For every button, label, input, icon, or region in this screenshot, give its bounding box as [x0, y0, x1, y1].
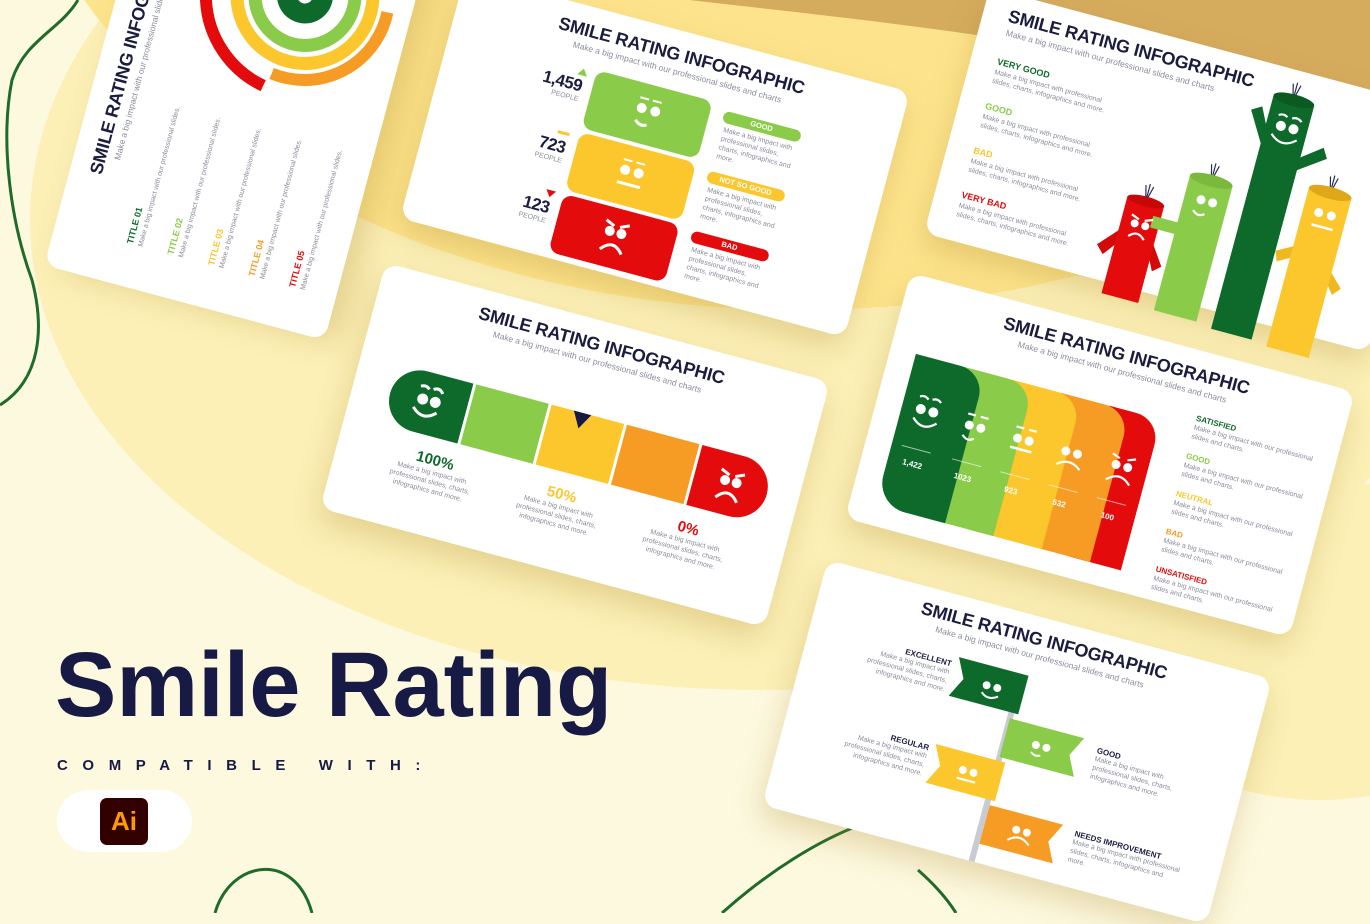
count 123: PEOPLE [518, 211, 546, 225]
count 1459: PEOPLE [550, 89, 579, 103]
marker triangle [569, 410, 591, 431]
card A rows: Make a big impact with our professional slides. [137, 106, 181, 247]
card D subtitle: Make a big impact with our professional slides and charts [1005, 28, 1216, 93]
icon: illustrator: Ai [111, 806, 137, 836]
count 1459: 1,459 [541, 67, 584, 95]
count 123 [518, 189, 556, 225]
label satisfied: SATISFIED [1195, 414, 1237, 433]
flag pole with flags [925, 657, 1084, 864]
label needs improvement: Make a big impact with professional slides, charts, infographics and more. [1067, 839, 1180, 879]
label bad [683, 232, 769, 290]
green happy box [581, 70, 712, 159]
label good: GOOD [984, 101, 1013, 118]
rating bar [389, 370, 768, 518]
label bad: Make a big impact with professional slides, charts, infographics and more. [967, 158, 1081, 203]
light green [1150, 216, 1180, 235]
count 723: 723 [537, 132, 568, 157]
label regular: REGULAR [890, 733, 930, 752]
label bad: Make a big impact with professional slides, charts, infographics and more. [683, 247, 761, 290]
card A rows: TITLE 04 [246, 239, 266, 277]
label unsatisfied: Make a big impact with our professional slides and charts. [1150, 575, 1273, 614]
label good: GOOD [1096, 746, 1122, 761]
card A rows: TITLE 03 [206, 228, 225, 267]
label not so good [699, 172, 785, 230]
card A rows: TITLE 01 [124, 206, 144, 245]
label very good: VERY GOOD [996, 56, 1051, 80]
card C subtitle: Make a big impact with our professional slides and charts [492, 329, 703, 395]
bars chart: 532 [1051, 497, 1067, 510]
card E title: SMILE RATING INFOGRAPHIC [1001, 313, 1252, 398]
yellow neutral box [564, 132, 696, 221]
label not so good: Make a big impact with professional slides, charts, infographics and more. [699, 187, 777, 230]
card C title: SMILE RATING INFOGRAPHIC [476, 303, 727, 388]
red [1093, 225, 1167, 273]
card D title: SMILE RATING INFOGRAPHIC [1006, 6, 1256, 91]
main title: Smile Rating [55, 634, 612, 736]
label 100%: 100% [414, 448, 456, 474]
label 0%: 0% [676, 518, 701, 540]
label 0%: Make a big impact with professional slides, charts, infographics and more. [642, 529, 723, 571]
faces [1129, 90, 1356, 277]
label excellent: EXCELLENT [904, 647, 953, 668]
bars chart: 1,422 [901, 457, 923, 471]
card F: flags [762, 560, 1272, 924]
label not so good: NOT SO GOOD [718, 175, 773, 197]
label bad: BAD [972, 145, 994, 160]
compatible with text: COMPATIBLE WITH: [57, 757, 435, 774]
label very bad: Make a big impact with professional slides, charts, infographics and more. [956, 202, 1069, 248]
label unsatisfied: UNSATISFIED [1155, 565, 1208, 587]
bars chart [882, 354, 1156, 570]
label neutral: Make a big impact with our professional slides and charts. [1170, 500, 1293, 538]
label good: Make a big impact with professional slides, charts, infographics and more. [1089, 756, 1173, 798]
label good: GOOD [1185, 451, 1211, 467]
card B: people counts [400, 0, 910, 337]
label needs improvement: NEEDS IMPROVEMENT [1074, 829, 1162, 861]
card A rows: TITLE 05 [287, 250, 306, 288]
card A rows: Make a big impact with our professional slides. [218, 128, 262, 269]
label bad: BAD [721, 239, 739, 252]
icon: illustrator [100, 798, 148, 845]
label satisfied: Make a big impact with our professional slides and charts. [1190, 424, 1313, 463]
card A rows: Make a big impact with our professional slides. [178, 117, 222, 258]
count 123: 123 [521, 192, 552, 217]
card E: vertical bars [845, 273, 1355, 637]
card F subtitle: Make a big impact with our professional slides and charts [934, 624, 1145, 690]
bars chart: 100 [1099, 510, 1115, 523]
card F title: SMILE RATING INFOGRAPHIC [919, 598, 1169, 683]
label good: GOOD [749, 119, 774, 133]
bars chart: 923 [1003, 484, 1018, 497]
label very good: Make a big impact with professional slides, charts, infographics and more. [991, 69, 1105, 114]
label good [715, 112, 801, 170]
label 100%: Make a big impact with professional slides, charts, infographics and more. [389, 461, 470, 503]
label excellent: Make a big impact with professional slides, charts, infographics and more. [866, 651, 950, 693]
card A rings chart [200, 0, 394, 92]
card D: tree characters [924, 0, 1370, 352]
card A rows: Make a big impact with our professional slides. [259, 138, 303, 280]
label bad: BAD [1165, 527, 1184, 540]
label 50%: Make a big impact with professional slides, charts, infographics and more. [515, 495, 597, 537]
red angry box [548, 194, 679, 283]
label regular: Make a big impact with professional slides, charts, infographics and more. [844, 735, 928, 777]
bars chart: 1023 [952, 471, 972, 484]
label very bad: VERY BAD [960, 190, 1007, 211]
count 723 [534, 130, 570, 165]
card A rows: TITLE 02 [165, 217, 184, 256]
label good: Make a big impact with professional slides, charts, infographics and more. [979, 113, 1093, 159]
yellow [1268, 241, 1348, 297]
card B title: SMILE RATING INFOGRAPHIC [556, 13, 807, 98]
label neutral: NEUTRAL [1175, 489, 1214, 508]
card B subtitle: Make a big impact with our professional slides and charts [572, 39, 783, 105]
label good: Make a big impact with our professional slides and charts. [1180, 462, 1303, 501]
card C: gauge bar [320, 263, 830, 627]
card E subtitle: Make a big impact with our professional slides and charts [1017, 339, 1228, 405]
card A rows: Make a big impact with our professional slides. [299, 149, 344, 291]
Ai badge [57, 790, 192, 852]
card A rows [124, 106, 344, 291]
tree characters illustration [1097, 82, 1352, 358]
dark green [1238, 104, 1335, 178]
count 723: PEOPLE [534, 151, 563, 165]
label bad: Make a big impact with our professional slides and charts. [1160, 537, 1283, 576]
label 50%: 50% [545, 483, 578, 507]
label good: Make a big impact with professional slides, charts, infographics and more. [715, 127, 793, 170]
card A: vertical smile rating with rings [44, 0, 442, 340]
